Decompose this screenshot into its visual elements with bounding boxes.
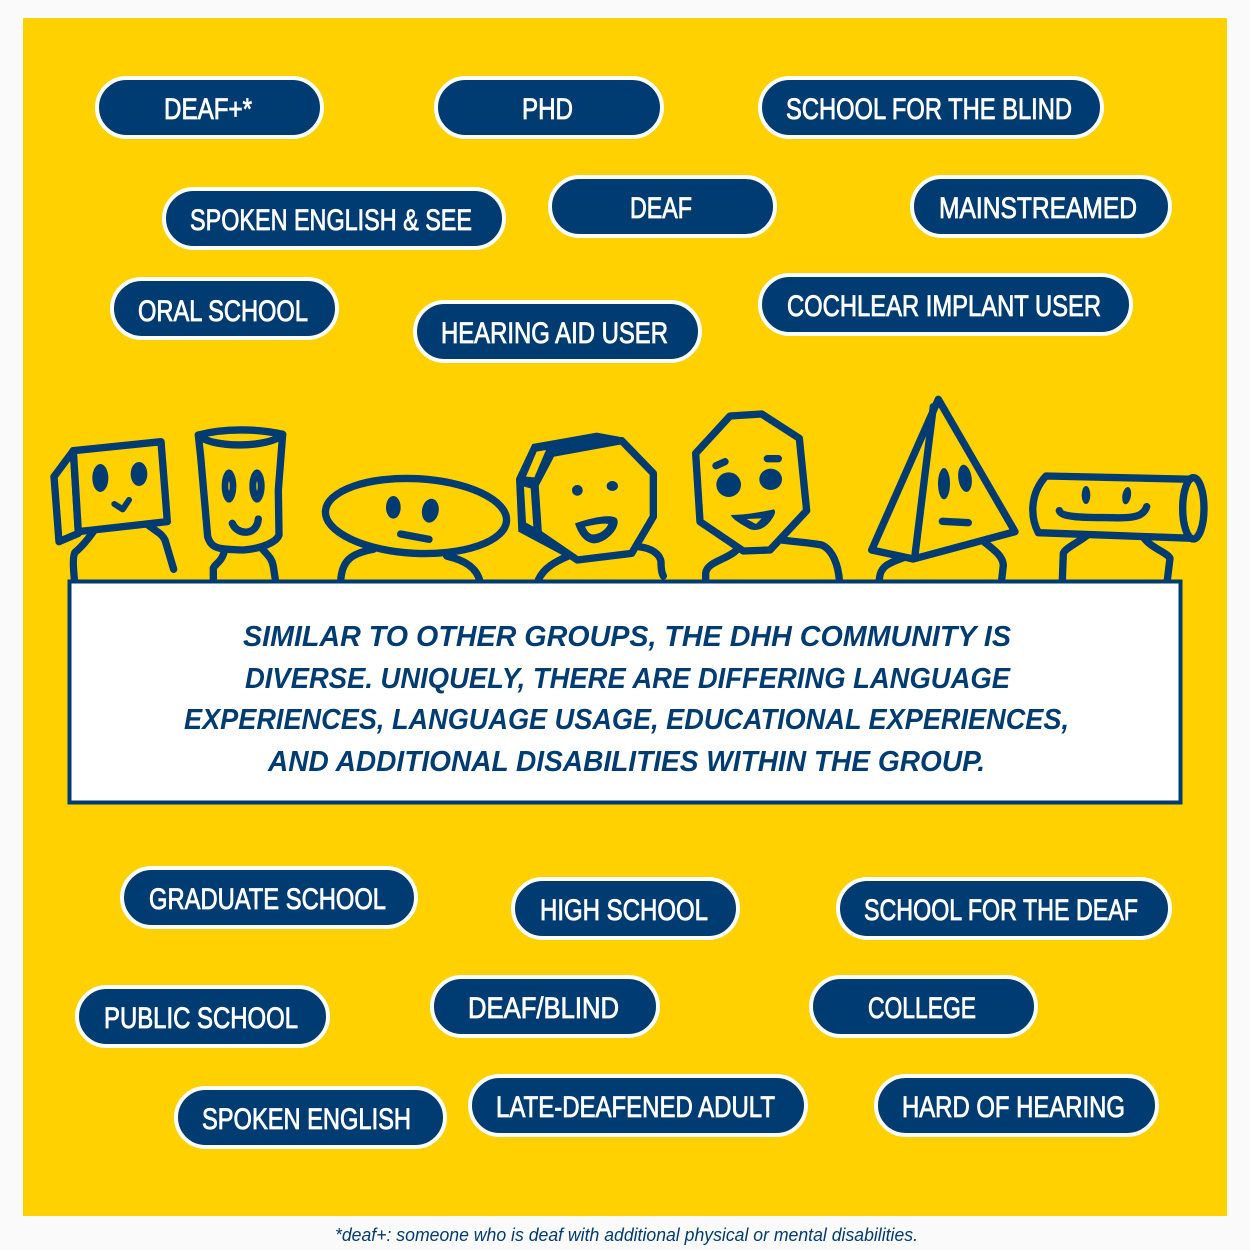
character: box head — [54, 442, 174, 582]
character: cup head — [198, 430, 283, 582]
tag: deaf+: DEAF+* — [164, 93, 252, 126]
tag: hearing aid user: HEARING AID USER — [441, 317, 668, 350]
tag: public school — [77, 987, 328, 1046]
tag: school for the blind — [760, 78, 1102, 137]
tag: school for the deaf: SCHOOL FOR THE DEAF — [864, 894, 1138, 927]
tag: graduate school: GRADUATE SCHOOL — [149, 883, 386, 916]
top tag cloud — [97, 78, 1170, 361]
tag: mainstreamed: MAINSTREAMED — [939, 192, 1137, 225]
tag: school for the blind: SCHOOL FOR THE BLIND — [786, 93, 1072, 126]
tag: high school — [513, 879, 738, 938]
character: pyramid head — [872, 399, 1015, 580]
tag: cochlear implant user — [760, 275, 1131, 334]
tag: deaf — [550, 177, 775, 236]
tag: late-deafened adult: LATE-DEAFENED ADULT — [496, 1091, 775, 1124]
footnote: *deaf+: someone who is deaf with additional physical or mental disabilities. — [335, 1224, 918, 1245]
tag: hard of hearing — [876, 1076, 1157, 1135]
character: octagon head with eyebrows — [696, 414, 839, 580]
bottom tag cloud — [77, 868, 1170, 1147]
tag: spoken English: SPOKEN ENGLISH — [202, 1103, 411, 1136]
tag: hard of hearing: HARD OF HEARING — [902, 1091, 1125, 1124]
tag: school for the deaf — [838, 879, 1170, 938]
tag: oral school — [112, 279, 337, 338]
tag: spoken English and SEE — [164, 189, 504, 248]
tag: hearing aid user — [415, 302, 700, 361]
callout text: DIVERSE. UNIQUELY, THERE ARE DIFFERING LANGUAGE — [245, 663, 1012, 695]
tag: spoken English and SEE: SPOKEN ENGLISH & SEE — [190, 204, 472, 237]
callout text: AND ADDITIONAL DISABILITIES WITHIN THE GROUP. — [267, 746, 985, 778]
tag: public school: PUBLIC SCHOOL — [104, 1002, 298, 1035]
callout text: EXPERIENCES, LANGUAGE USAGE, EDUCATIONAL EXPERIENCES, — [184, 704, 1069, 736]
tag: deaf: DEAF — [630, 192, 692, 225]
tag: PhD: PHD — [522, 93, 573, 126]
tag: high school: HIGH SCHOOL — [540, 894, 708, 927]
character: prism octagon head — [516, 433, 663, 580]
tag: mainstreamed — [912, 177, 1170, 236]
tag: deaf+ — [97, 78, 322, 137]
callout text: SIMILAR TO OTHER GROUPS, THE DHH COMMUNITY IS — [243, 621, 1012, 653]
tag: PhD — [436, 78, 662, 137]
callout box — [70, 582, 1180, 802]
tag: spoken English — [176, 1088, 445, 1147]
tag: late-deafened adult — [470, 1076, 806, 1135]
character: oval head — [324, 474, 508, 582]
tag: cochlear implant user: COCHLEAR IMPLANT USER — [787, 290, 1101, 323]
tag: oral school: ORAL SCHOOL — [138, 295, 308, 328]
tag: deaf/blind — [432, 977, 658, 1036]
tag: college — [811, 977, 1036, 1036]
character: cylinder head — [1033, 476, 1204, 580]
callout text — [184, 621, 1069, 778]
tag: graduate school — [122, 868, 416, 927]
tag: college: COLLEGE — [868, 992, 976, 1025]
tag: deaf/blind: DEAF/BLIND — [468, 992, 619, 1025]
